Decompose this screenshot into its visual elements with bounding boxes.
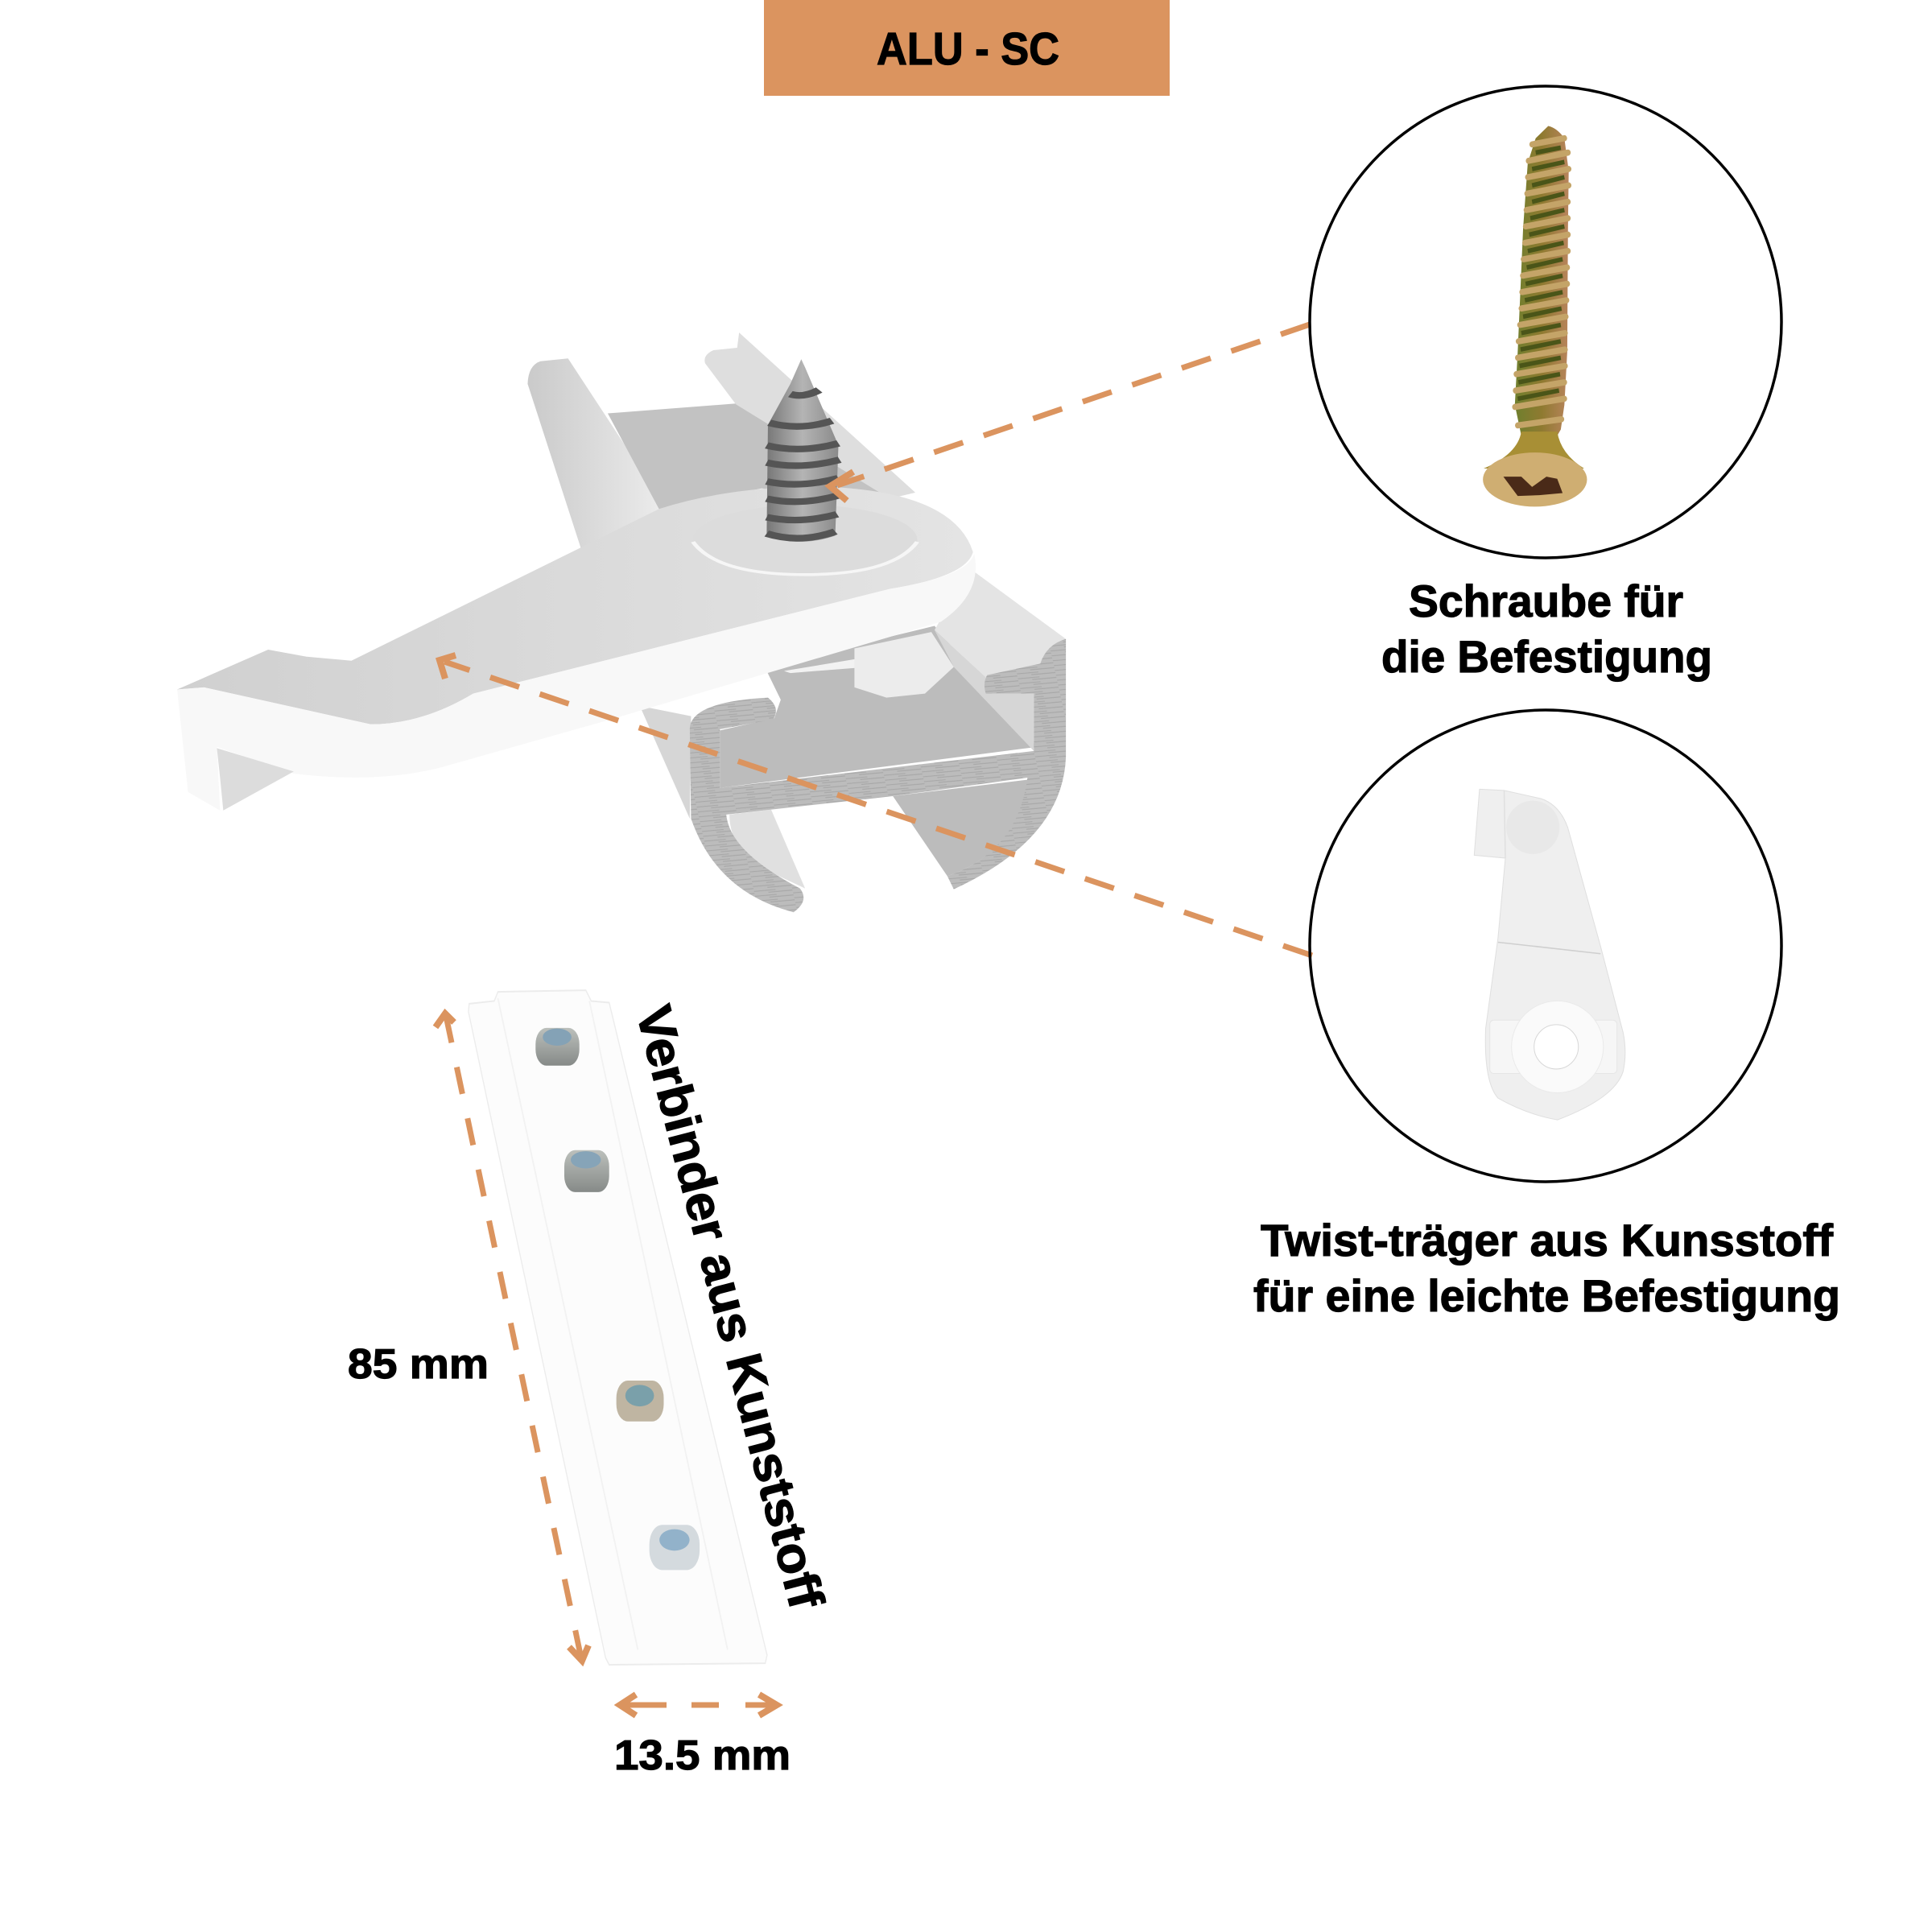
lever arm hook shadow [217,748,294,811]
rail lower right channel [893,780,1027,876]
set screw 3 [617,1381,663,1422]
rail lower left channel [729,810,805,889]
dimension arrow: 85 mm [436,1013,588,1661]
lever arm front face [177,554,976,811]
rail upper ridge [704,332,915,499]
rail lip strip [935,568,1066,677]
caption: twist carrier: für eine leichte Befestigung [1253,1270,1840,1321]
plastic twist block under arm [854,632,954,698]
washer on lever [693,505,917,575]
rail back bar [527,358,666,552]
dimension label: 13.5 mm: 13.5 mm [614,1732,791,1779]
rail cut section [690,639,1066,912]
product: aluminium rail with twist bracket and screw [177,332,1066,912]
plastic twist disc [784,658,857,673]
plate rail edges [497,998,728,1649]
plate body [469,990,767,1665]
caption: screw [1381,576,1712,682]
set screw 4 [650,1525,700,1570]
rail inner right wall [935,630,1034,751]
dimension label: 85 mm: 85 mm [348,1341,489,1388]
circle: twist carrier detail [1310,710,1781,1182]
lever arm top surface [177,486,973,724]
mounting screw [766,359,840,542]
circle: screw detail [1310,86,1781,558]
icon: plastic twist carrier [1474,789,1625,1120]
caption: twist carrier: Twist-träger aus Kunsstoff [1261,1215,1833,1265]
caption: twist carrier [1253,1215,1840,1321]
title banner: ALU - SC [877,23,1059,75]
dashed pointer to twist carrier [440,655,1312,956]
connector label rotated: Verbinder aus Kunststoff [625,1000,834,1614]
set screw 2 [564,1150,609,1192]
rail interior cavity [720,625,1037,788]
rail upper plate [608,403,896,509]
caption: screw: Schraube für [1409,576,1683,626]
connector plate with four set screws [469,990,767,1665]
icon: gold screw [1483,126,1587,506]
rail lower side strip [640,706,691,819]
set screw 1 [535,1028,580,1066]
caption: screw: die Befestigung [1381,631,1712,682]
title banner [764,0,1170,96]
dashed pointer to screw [830,324,1310,501]
dimension arrow: 13.5 mm [620,1695,777,1715]
